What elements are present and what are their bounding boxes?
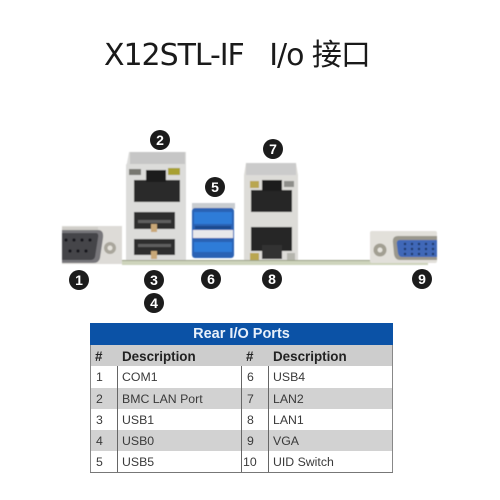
column headings: Description (122, 349, 196, 364)
column headings: # (95, 349, 102, 364)
badge 4 (144, 293, 164, 313)
badge 7 (263, 139, 283, 159)
row 3: LAN1 (273, 413, 304, 427)
badge 6 (201, 269, 221, 289)
row 1: USB4 (273, 370, 305, 384)
badge 1 (69, 270, 89, 290)
row 4 (90, 430, 393, 451)
badge 2: 2 (156, 132, 164, 148)
row 3: 3 (96, 413, 103, 427)
title: X12STL-IF I/o 接口 (104, 38, 370, 73)
column headings: # (246, 349, 253, 364)
row 5: UID Switch (273, 455, 334, 469)
board edge (122, 260, 428, 265)
badge 4: 4 (150, 295, 158, 311)
row 5: USB5 (122, 455, 154, 469)
column headings: Description (273, 349, 347, 364)
row 2: 2 (96, 392, 103, 406)
row 3: 8 (247, 413, 254, 427)
badge 1: 1 (75, 272, 83, 288)
port: COM1 serial connector (62, 226, 122, 264)
row 4: VGA (273, 434, 299, 448)
row 5: 10 (243, 455, 257, 469)
row 3 (90, 409, 393, 430)
row 4: 9 (247, 434, 254, 448)
port: VGA connector (370, 231, 437, 263)
column headings (90, 345, 393, 366)
row 2 (90, 388, 393, 409)
badge 3: 3 (150, 272, 158, 288)
badge 5 (205, 177, 225, 197)
badge 8: 8 (268, 271, 276, 287)
badge 9 (412, 269, 432, 289)
callout badges (69, 130, 432, 313)
badge 7: 7 (269, 141, 277, 157)
table: Rear I/O Ports (90, 323, 393, 473)
row 1: 1 (96, 370, 103, 384)
row 3: USB1 (122, 413, 154, 427)
row 5 (90, 451, 393, 472)
row 2: LAN2 (273, 392, 304, 406)
badge 9: 9 (418, 271, 426, 287)
table header (90, 323, 393, 345)
row 2: BMC LAN Port (122, 392, 203, 406)
table header: Rear I/O Ports (193, 326, 290, 342)
badge 3 (144, 270, 164, 290)
port: LAN stack (244, 163, 298, 260)
row 1: 6 (247, 370, 254, 384)
badge 6: 6 (207, 271, 215, 287)
row 4: USB0 (122, 434, 154, 448)
row 2: 7 (247, 392, 254, 406)
badge 2 (150, 130, 170, 150)
row 1: COM1 (122, 370, 158, 384)
row 5: 5 (96, 455, 103, 469)
row 4: 4 (96, 434, 103, 448)
badge 5: 5 (211, 179, 219, 195)
port: USB 3 stack (192, 203, 235, 258)
row 1 (90, 366, 393, 388)
port: BMC LAN and USB stack (126, 152, 186, 260)
badge 8 (262, 269, 282, 289)
port illustration (61, 130, 438, 313)
